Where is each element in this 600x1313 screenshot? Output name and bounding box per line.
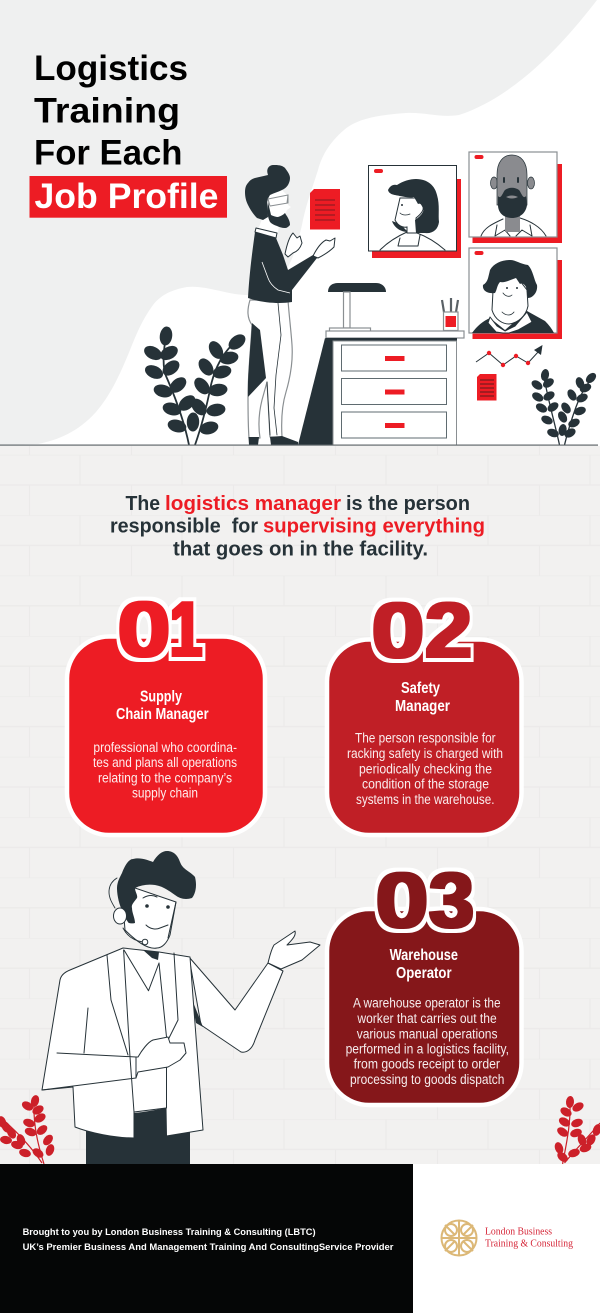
title: For Each: [34, 134, 182, 172]
footer text: UK’s Premier Business And Management Training And ConsultingService Provider: [23, 1242, 394, 1253]
footer: logo: Training & Consulting: [485, 1238, 574, 1250]
card 02 body text: periodically checking the: [359, 761, 492, 776]
card 03 body text: [346, 996, 509, 1087]
number 01: 1: [170, 585, 202, 673]
card 03 body text: from goods receipt to order: [354, 1057, 500, 1072]
plant: red right: [553, 1096, 600, 1164]
line chart icon with arrow: [476, 345, 542, 367]
footer text: [23, 1227, 394, 1253]
card 02 body text: racking safety is charged with: [347, 746, 503, 761]
illustration: desk with drawers: [298, 331, 464, 445]
footer: black panel: [0, 1164, 413, 1313]
illustration: standing man: [245, 165, 335, 445]
card 01 body text: tes and plans all operations: [93, 755, 237, 770]
number 01: 0: [118, 585, 170, 673]
intro statement: supervising everything: [263, 516, 485, 538]
footer text: Brought to you by London Business Training & Consulting (LBTC): [23, 1227, 316, 1238]
panel: card 03 warehouse operator: [327, 856, 522, 1105]
card 01 body text: professional who coordina-: [93, 740, 237, 755]
title: [30, 49, 227, 218]
card 02 heading: Manager: [395, 698, 450, 715]
card 02 body text: The person responsible for: [355, 731, 496, 746]
card 02 heading: [395, 680, 450, 715]
number 03: 0: [376, 856, 428, 944]
card 01 heading: Supply: [140, 689, 182, 706]
illustration: presenter with headset: [42, 851, 320, 1164]
intro statement: logistics manager: [165, 493, 341, 515]
footer: logo: [441, 1220, 574, 1256]
card 03 heading: Warehouse: [390, 947, 458, 964]
card 02 body text: [347, 731, 503, 807]
plant: red left: [0, 1094, 56, 1164]
title: Logistics: [34, 49, 188, 88]
card 02 body text: systems in the warehouse.: [356, 792, 494, 807]
portrait: bald man with beard: [469, 152, 562, 243]
footer: logo: London Business: [485, 1226, 552, 1238]
icon: red document floating: [310, 189, 340, 230]
number 02: 2: [425, 586, 472, 674]
portrait: man with dark hair: [469, 248, 562, 339]
card 02 body text: condition of the storage: [362, 777, 489, 792]
card 01 heading: [116, 689, 209, 723]
card 03 body text: A warehouse operator is the: [353, 996, 501, 1011]
number 03: 3: [429, 856, 474, 944]
card 02 heading: Safety: [401, 680, 440, 697]
number 02: 0: [372, 586, 424, 674]
card 03 heading: Operator: [396, 965, 452, 982]
intro statement: is the person: [346, 493, 470, 515]
portrait: woman: [368, 166, 461, 258]
card 03 body text: various manual operations: [357, 1026, 498, 1041]
intro statement: responsible for: [110, 516, 258, 538]
card 03 heading: [390, 947, 458, 982]
plant: small right pair: [530, 368, 598, 445]
title: Job Profile: [34, 177, 218, 216]
intro statement: that goes on in the facility.: [173, 538, 428, 560]
card 03 body text: performed in a logistics facility,: [346, 1041, 509, 1056]
card 01 body text: [93, 740, 237, 801]
hero background blob: [0, 0, 597, 445]
panel: card 01 supply chain manager: [67, 585, 265, 835]
illustration: pen cup: [442, 298, 458, 330]
icon: small red document: [477, 374, 496, 400]
illustration: desk lamp: [328, 283, 386, 332]
icon: celtic knot emblem: [441, 1220, 477, 1256]
brick wall background: [0, 446, 600, 1164]
plant: large left pair: [142, 326, 248, 445]
intro statement: [110, 493, 485, 560]
card 03 body text: processing to goods dispatch: [350, 1072, 504, 1087]
title: Training: [34, 92, 180, 130]
intro statement: The: [126, 493, 160, 515]
card 03 body text: worker that carries out the: [357, 1011, 497, 1026]
card 01 body text: supply chain: [132, 786, 198, 801]
panel: card 02 safety manager: [327, 586, 522, 835]
card 01 heading: Chain Manager: [116, 706, 209, 723]
card 01 body text: relating to the company’s: [98, 770, 232, 786]
